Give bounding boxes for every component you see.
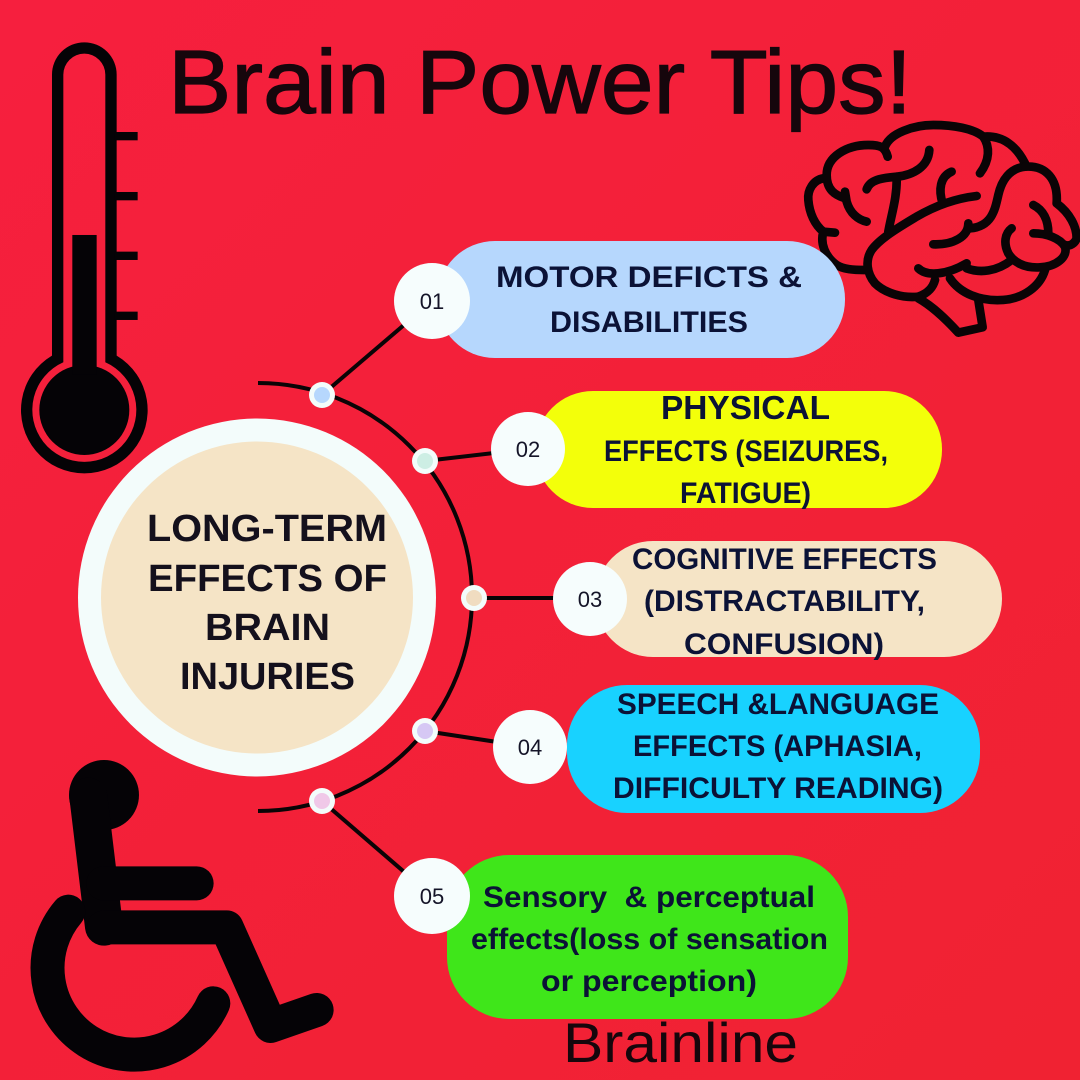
central circle (78, 418, 436, 776)
number badge 03 (553, 562, 627, 636)
panel: 04 speech and language effects: DIFFICULTY READING) (613, 772, 943, 805)
central heading: BRAIN (205, 607, 330, 649)
panel: 04 speech and language effects (567, 685, 980, 813)
panel: 03 cognitive effects: CONFUSION) (684, 628, 884, 661)
node dot 4 (412, 718, 438, 744)
panel: 05 sensory and perceptual effects: or perception) (541, 965, 757, 998)
panel: 02 physical effects: EFFECTS (SEIZURES, (604, 435, 888, 468)
panel: 01 motor deficits (437, 241, 845, 358)
number badge 02 (491, 412, 565, 486)
number badge 01 (394, 263, 470, 339)
panel: 05 sensory and perceptual effects: effects(loss of sensation (471, 923, 828, 956)
connector lines (322, 301, 590, 896)
panel: 03 cognitive effects: (DISTRACTABILITY, (644, 585, 925, 618)
panel: 05 sensory and perceptual effects (447, 855, 848, 1019)
icon: brain (808, 125, 1077, 333)
node dot 3 (461, 585, 487, 611)
number badge 02: 02 (516, 437, 540, 462)
number badge 03: 03 (578, 587, 602, 612)
panel: 03 cognitive effects: COGNITIVE EFFECTS (632, 543, 937, 576)
panel: 04 speech and language effects: EFFECTS (APHASIA, (633, 730, 922, 763)
number badge 01: 01 (420, 289, 444, 314)
central heading (147, 508, 387, 698)
icon: wheelchair (48, 760, 317, 1055)
title: Brain Power Tips! (168, 33, 912, 133)
number badge 05: 05 (420, 884, 444, 909)
panel: 02 physical effects (535, 389, 942, 510)
source credit: Brainline (563, 1011, 798, 1074)
panel: 01 motor deficits: MOTOR DEFICTS & (496, 261, 802, 294)
panel: 02 physical effects: FATIGUE) (680, 477, 811, 510)
node dot 5 (309, 788, 335, 814)
central heading: LONG-TERM (147, 508, 387, 550)
connector arc (258, 383, 472, 811)
icon: thermometer (21, 42, 148, 473)
central heading: INJURIES (180, 656, 355, 698)
central heading: EFFECTS OF (148, 558, 387, 600)
panel: 05 sensory and perceptual effects: Sensory & perceptual (483, 881, 815, 914)
node dot 2 (412, 448, 438, 474)
panel: 04 speech and language effects: SPEECH &LANGUAGE (617, 688, 939, 721)
number badge 05 (394, 858, 470, 934)
panel: 03 cognitive effects (595, 541, 1002, 661)
number badge 04 (493, 710, 567, 784)
node dot 1 (309, 382, 335, 408)
panel: 02 physical effects: PHYSICAL (661, 389, 830, 426)
panel: 01 motor deficits: DISABILITIES (550, 306, 748, 339)
number badge 04: 04 (518, 735, 542, 760)
